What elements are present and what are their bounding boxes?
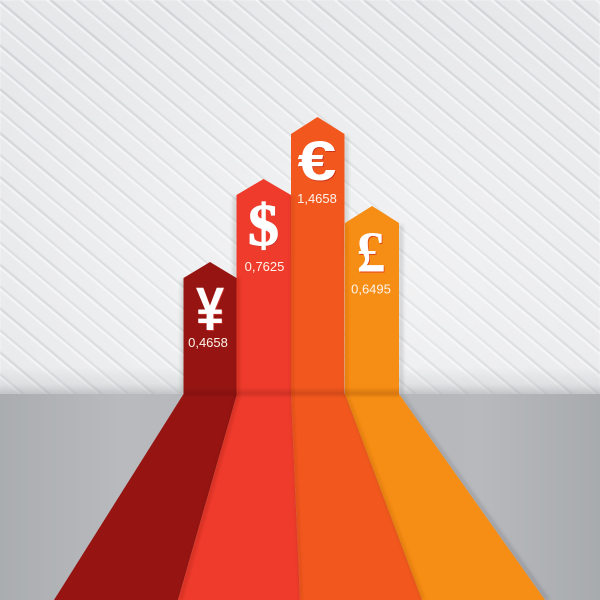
label: yen: ¥	[197, 275, 225, 344]
label: dollar: $	[248, 193, 279, 259]
outer shadows	[181, 136, 550, 600]
label: yen: ¥	[196, 275, 224, 343]
grey floor	[0, 394, 600, 600]
bar: pound	[345, 206, 545, 600]
label: euro: €	[298, 131, 337, 193]
label: yen: 0,4658	[188, 335, 228, 350]
bar chart: currency arrows	[54, 117, 550, 600]
label: pound	[351, 220, 391, 296]
striped wall background	[0, 0, 600, 394]
fold seams	[180, 196, 423, 600]
label: euro: 1,4658	[297, 191, 337, 206]
label: pound: £	[357, 220, 386, 285]
label: yen	[188, 275, 228, 350]
bar: yen	[54, 262, 237, 600]
label: euro: €	[298, 131, 336, 192]
label: pound: 0,6495	[351, 282, 391, 296]
bar: euro	[291, 117, 422, 600]
label: dollar: 0,7625	[245, 259, 284, 274]
label: dollar: $	[249, 194, 280, 260]
label: dollar	[245, 193, 284, 274]
bar: dollar	[178, 179, 300, 600]
label: pound: £	[356, 220, 386, 284]
